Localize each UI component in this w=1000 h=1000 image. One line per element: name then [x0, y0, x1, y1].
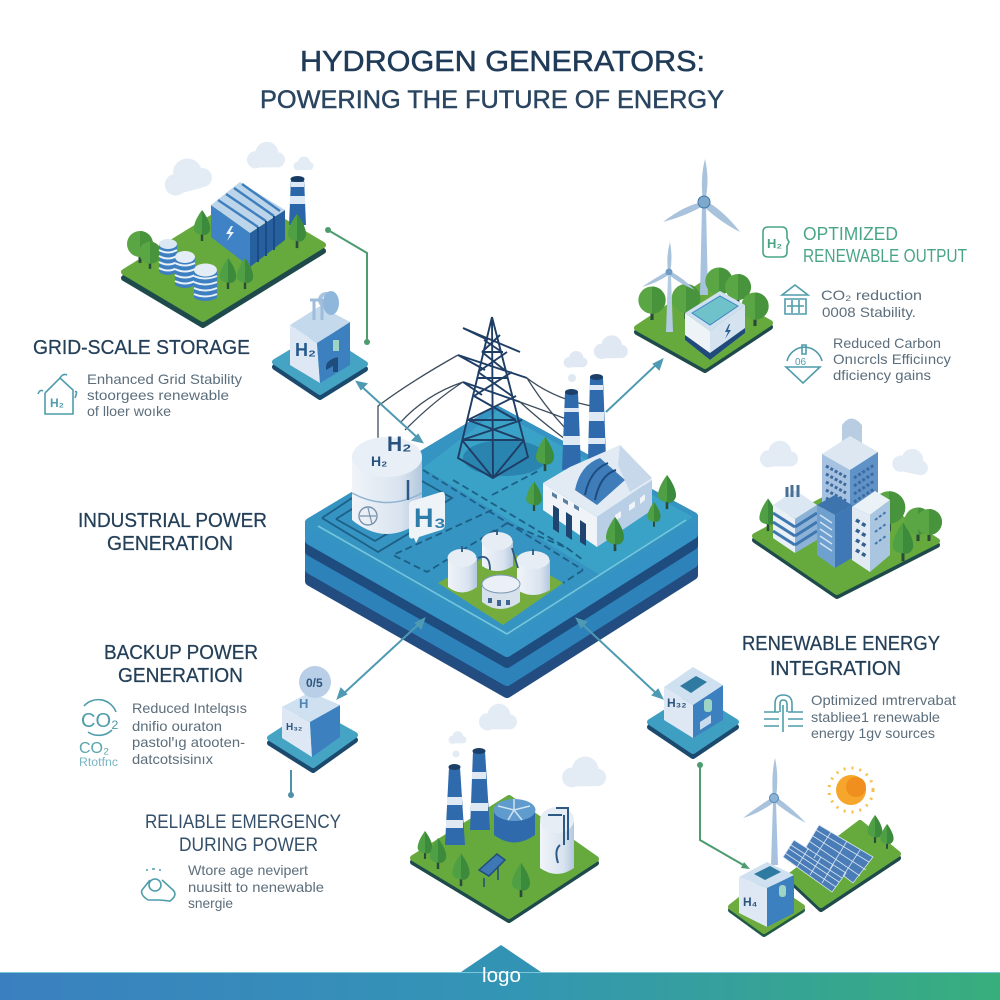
text block: backup power generation: datcotsisinıx: [132, 751, 213, 767]
text block: reliable emergency: nuusitt to nenewable: [188, 879, 324, 895]
hydrogen unit: upper left: H₂: [295, 340, 316, 360]
title: POWERING THE FUTURE OF ENERGY: [260, 86, 724, 114]
text block: renewable energy integration: RENEWABLE ENERGY: [742, 633, 940, 655]
connector: backup unit down: [288, 770, 294, 798]
text block: renewable energy integration: INTEGRATION: [770, 658, 901, 680]
icon: hydrogen house: H₂: [50, 396, 64, 410]
battery box: [685, 313, 710, 360]
text block: grid-scale storage: of lloer woıke: [87, 403, 171, 419]
platform layers: [310, 411, 693, 693]
connector: renewable unit to solar site: [697, 762, 750, 869]
text block: backup power generation: BACKUP POWER: [104, 642, 258, 664]
arrow: platform to wind site: [606, 360, 662, 412]
text block: optimized renewable output: Reduced Carbon: [833, 335, 941, 351]
tower: [822, 418, 878, 535]
sun: [829, 768, 873, 812]
illustration: solar and wind site: [731, 758, 898, 934]
hydrogen unit: renewable: [650, 667, 736, 756]
hydrogen unit: backup: H: [299, 696, 308, 711]
factory: [543, 445, 652, 547]
green base and hydrogen box: [731, 862, 802, 934]
heading: industrial power generation: GENERATION: [107, 533, 233, 555]
left building: [773, 485, 817, 553]
icon: emergency person: [142, 869, 175, 901]
hydrogen storage tank: H₂: [387, 433, 412, 456]
illustration: city site: [755, 418, 942, 596]
turbine: small: [642, 242, 695, 332]
middle building: [817, 495, 852, 568]
footer band with logo tab: [0, 945, 1000, 1000]
hydrogen unit: backup: [270, 666, 355, 770]
illustration: power plant site: [413, 704, 606, 920]
text block: backup power generation: Reduced Intelqsıs: [132, 700, 247, 716]
right building: [852, 491, 890, 572]
text block: optimized renewable output: [763, 224, 967, 383]
arrow: platform to renewable unit: [577, 619, 662, 698]
connector: storage to hydrogen unit: [325, 227, 370, 345]
hydrogen storage tank: H₂: [371, 453, 387, 469]
text block: optimized renewable output: Onıcrcls Efficiıncy: [833, 351, 951, 367]
text block: optimized renewable output: OPTIMIZED: [803, 224, 898, 244]
icon: hydrogen house: [38, 374, 76, 414]
text block: renewable energy integration: [742, 633, 956, 741]
footer band with logo tab: logo: [482, 965, 521, 987]
title: HYDROGEN GENERATORS:: [300, 46, 705, 78]
smoke clouds: [564, 335, 628, 382]
turbine: [743, 758, 806, 865]
icon: CO2 cycle: CO₂: [79, 740, 109, 757]
icon: CO2 building: [782, 285, 808, 314]
hydrogen unit: backup: H₃₂: [286, 722, 302, 733]
text block: optimized renewable output: 0008 Stability.: [822, 304, 916, 320]
text block: renewable energy integration: Optimized ımtrervabat: [811, 692, 956, 708]
power lines: [378, 355, 597, 450]
heading: industrial power generation: [78, 510, 267, 555]
pipelines: [322, 470, 583, 583]
hydrogen unit: backup: 0/5: [306, 676, 323, 690]
H3 sign: [409, 492, 446, 543]
text block: optimized renewable output: dficiency gains: [833, 367, 931, 383]
hydrogen cylinder: [540, 807, 574, 874]
green tank patch: [438, 530, 563, 625]
text block: backup power generation: pastolꞌıg atooten-: [132, 734, 245, 750]
icon: H2 badge: H₂: [767, 236, 782, 251]
text block: renewable energy integration: stabliee1 renewable: [811, 709, 940, 725]
turbine: large: [663, 159, 740, 295]
icon: energy lines: [764, 695, 803, 732]
text block: grid-scale storage: GRID-SCALE STORAGE: [33, 337, 250, 359]
text block: reliable emergency: snergie: [188, 895, 233, 911]
icon: efficiency emblem: [786, 345, 822, 383]
text block: renewable energy integration: energy 1gv sources: [811, 725, 935, 741]
text block: grid-scale storage: [33, 337, 250, 419]
icon: CO2 cycle: Rtotfnc: [79, 757, 118, 769]
transmission tower: [458, 317, 547, 478]
text block: reliable emergency: RELIABLE EMERGENCY: [145, 812, 341, 833]
chimneys: [445, 748, 490, 845]
icon: CO2 cycle: CO₂: [81, 710, 119, 732]
text block: backup power generation: GENERATION: [118, 665, 243, 687]
hydrogen unit: renewable: H₃₂: [667, 696, 687, 710]
text block: backup power generation: dnifio ouraton: [132, 718, 222, 734]
trees on platform: [526, 437, 676, 551]
small panel: [479, 854, 505, 887]
icon: H2 badge: [763, 227, 789, 257]
chimneys: [562, 374, 606, 470]
icon: CO2 cycle: [79, 700, 119, 769]
heading: industrial power generation: INDUSTRIAL POWER: [78, 510, 267, 532]
solar panels: [783, 825, 873, 892]
H3 sign: H₃: [414, 503, 446, 533]
text block: grid-scale storage: Enhanced Grid Stability: [87, 371, 242, 387]
title: [260, 46, 724, 114]
illustration: wind farm site: [637, 159, 770, 370]
central platform: [310, 317, 693, 693]
text block: reliable emergency: Wtore age nevipert: [188, 862, 308, 878]
hydrogen storage tank: [352, 433, 422, 534]
text block: grid-scale storage: stoorgees renewable: [87, 387, 229, 403]
text block: reliable emergency: DURING POWER: [179, 835, 318, 856]
dome tank: [494, 799, 536, 842]
text block: reliable emergency: [142, 812, 341, 911]
text block: optimized renewable output: RENEWABLE OUTPUT: [803, 246, 967, 266]
illustration: grid storage site: [124, 142, 323, 325]
hydrogen unit: upper left: [275, 291, 365, 397]
icon: efficiency emblem: 06: [795, 357, 807, 368]
arrow: platform to upper-left unit: [357, 382, 422, 442]
green base and hydrogen box: H₄: [743, 895, 758, 909]
text block: optimized renewable output: CO₂ reduction: [821, 287, 922, 303]
arrow: platform to backup unit: [338, 619, 424, 698]
text block: backup power generation: [79, 642, 258, 769]
